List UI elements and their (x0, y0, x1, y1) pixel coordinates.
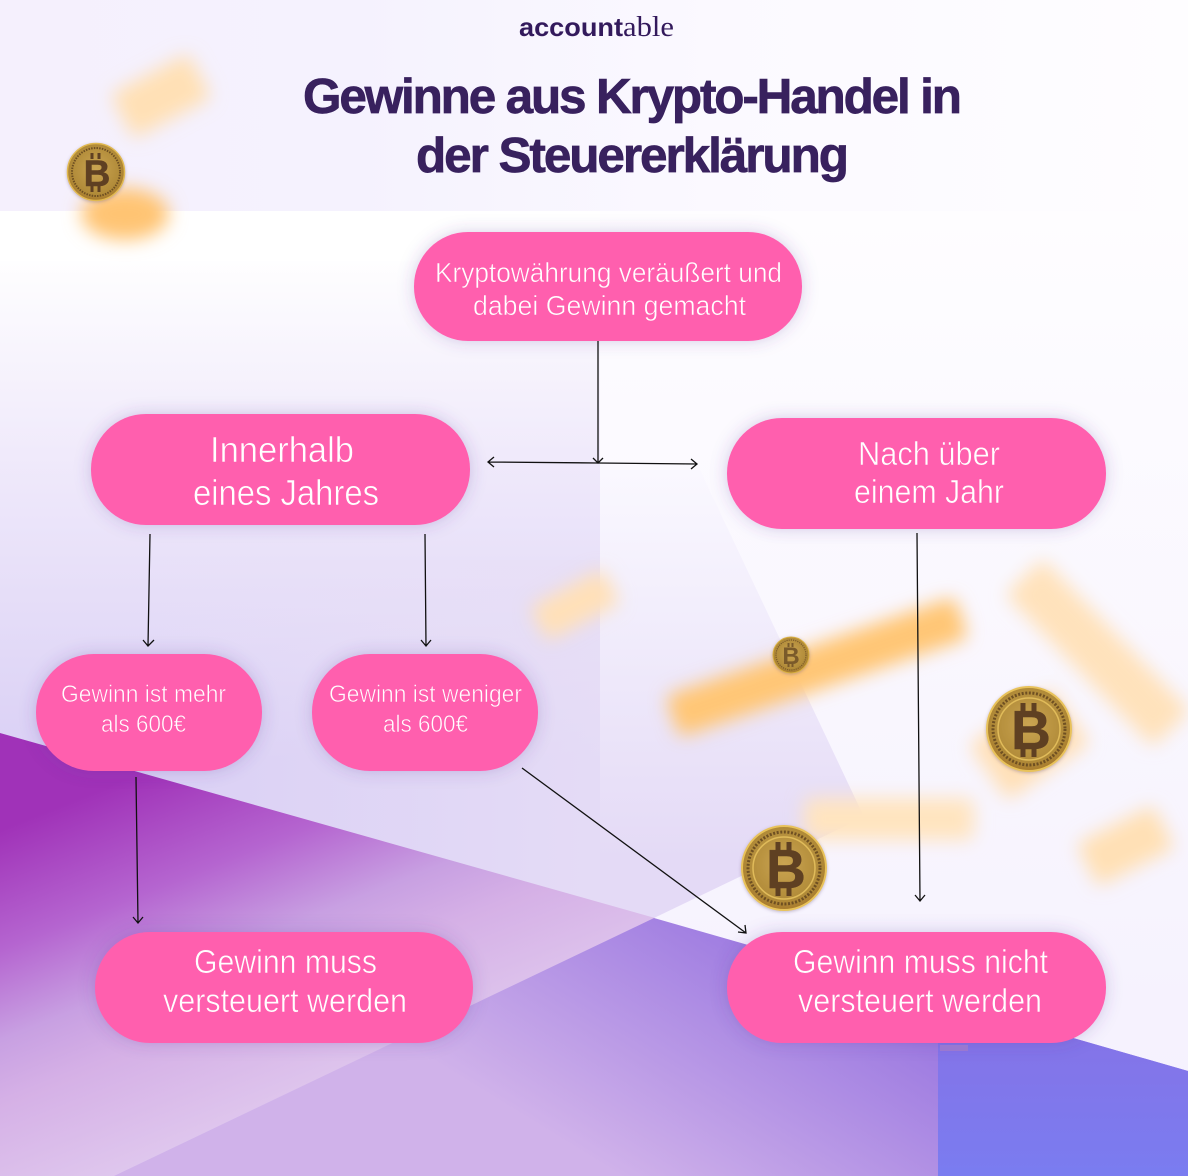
pill: Gewinn muss nicht versteuert werden: versteuert werden (798, 982, 1042, 1019)
title (303, 69, 962, 183)
title: Gewinne aus Krypto-Handel in (303, 69, 962, 124)
arrow: split to right (598, 459, 697, 469)
pill: Gewinn muss nicht versteuert werden (727, 932, 1106, 1043)
pill: Gewinn ist mehr als 600€: als 600€ (101, 711, 187, 738)
coin: right: B (1011, 699, 1051, 761)
arrow: more than 600 to taxed (133, 777, 143, 923)
background: purple triangle (0, 733, 655, 1176)
pill: Kryptowährung veräußert (414, 232, 802, 341)
pill: Gewinn muss nicht versteuert werden: Gewinn muss nicht (793, 943, 1048, 980)
pill: Innerhalb eines Jahres (91, 414, 470, 525)
pill: Nach über einem Jahr: einem Jahr (854, 473, 1004, 510)
pill: Nach über einem Jahr (727, 418, 1106, 529)
arrow: split to left (488, 457, 598, 467)
logo: accountable: account (519, 12, 623, 42)
pill: Gewinn muss versteuert werden: Gewinn muss (194, 943, 377, 980)
pill: Gewinn ist mehr als 600€ (36, 654, 262, 771)
pill: Gewinn muss versteuert werden: versteuert werden (163, 982, 407, 1019)
coin: small centre: B (782, 643, 800, 670)
logo: accountable: able (623, 11, 674, 43)
coin: top left: B (84, 153, 110, 194)
logo: accountable (519, 11, 674, 43)
arrow: to more than 600 (143, 534, 154, 646)
arrow: less than 600 to not taxed (522, 768, 746, 933)
coin: lower centre (742, 826, 826, 910)
background: violet polygon (114, 918, 1188, 1176)
coin: lower centre: B (766, 838, 806, 900)
pill: Innerhalb eines Jahres: Innerhalb (210, 429, 354, 470)
pill: Gewinn ist weniger als 600€: als 600€ (383, 711, 469, 738)
arrow: top pill down to split (593, 341, 603, 463)
arrow: to less than 600 (421, 534, 431, 646)
coin: right (987, 687, 1071, 771)
pill: Gewinn muss versteuert werden (95, 932, 473, 1043)
pill: Gewinn ist weniger als 600€: Gewinn ist weniger (329, 681, 522, 708)
arrow: after a year to no tax (915, 533, 925, 901)
pill: Gewinn ist mehr als 600€: Gewinn ist mehr (61, 681, 226, 708)
blurred orange shapes (81, 53, 1188, 887)
pill: Kryptowährung veräußert: dabei Gewinn gemacht (473, 290, 746, 321)
coin: top left (68, 144, 124, 200)
pill: Gewinn ist weniger als 600€ (312, 654, 538, 771)
title: der Steuererklärung (416, 128, 849, 183)
coin: small centre (773, 637, 809, 673)
pill: Kryptowährung veräußert: Kryptowährung veräußert und (435, 257, 782, 288)
small patch under pill (940, 1045, 968, 1051)
background: blue block (938, 999, 1188, 1176)
pill: Innerhalb eines Jahres: eines Jahres (193, 472, 379, 513)
pill: Nach über einem Jahr: Nach über (858, 435, 1000, 472)
